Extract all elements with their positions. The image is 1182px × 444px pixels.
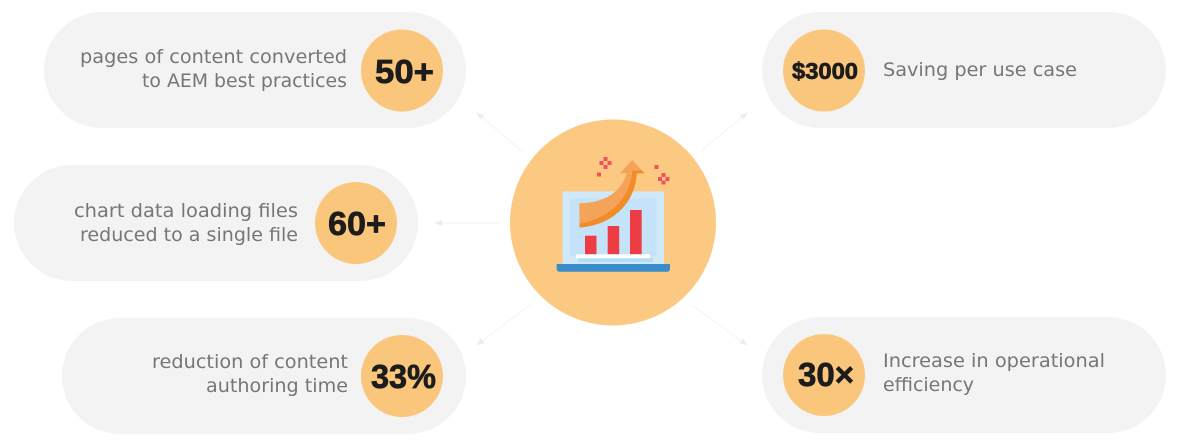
badge: $3000 (783, 30, 865, 112)
icon: laptop screen (562, 192, 664, 266)
arrow: to bottom right panel (692, 305, 747, 345)
text: increase in operational efficiency: efficiency (883, 374, 974, 396)
central circle with laptop growth icon (510, 120, 716, 326)
text: increase in operational efficiency: Increase in operational (883, 350, 1105, 372)
panel: 30x efficiency (762, 317, 1166, 433)
icon: bars (585, 210, 642, 254)
badge: 60+: 60+ (328, 205, 386, 242)
badge: 50+ (361, 30, 443, 112)
badge: 33% (361, 335, 443, 417)
icon: laptop base (557, 264, 670, 272)
panel: 33% authoring time (62, 318, 466, 434)
panel: $3000 saving (762, 12, 1166, 128)
text: pages of content converted: pages of content converted (80, 46, 347, 68)
panel: 60+ chart data files (14, 165, 418, 281)
badge: 30x: 30× (798, 356, 854, 393)
arrow: to middle left panel (435, 222, 501, 224)
badge: 33%: 33% (371, 358, 436, 395)
icon: bar baseline (576, 254, 650, 258)
badge: 60+ (315, 182, 397, 264)
text: saving per use case: Saving per use case (883, 59, 1077, 81)
badge: 50+: 50+ (375, 53, 434, 90)
text: chart data loading files: chart data loading files (74, 200, 298, 222)
arrow: to top right panel (700, 113, 747, 152)
text: pages of content converted: to AEM best practices (142, 70, 347, 92)
arrow: to top left panel (477, 113, 523, 152)
text: reduction of content authoring time: authoring time (206, 375, 348, 397)
text: chart data loading files: reduced to a single file (80, 224, 298, 246)
badge: 30x (783, 334, 865, 416)
arrow: to bottom left panel (477, 305, 530, 345)
badge: $3000: $3000 (792, 58, 858, 84)
panel: 50+ pages converted (44, 12, 466, 128)
icon: rising arrow (579, 160, 644, 228)
text: reduction of content authoring time: reduction of content (152, 351, 348, 373)
icon: sparkles (597, 157, 670, 184)
